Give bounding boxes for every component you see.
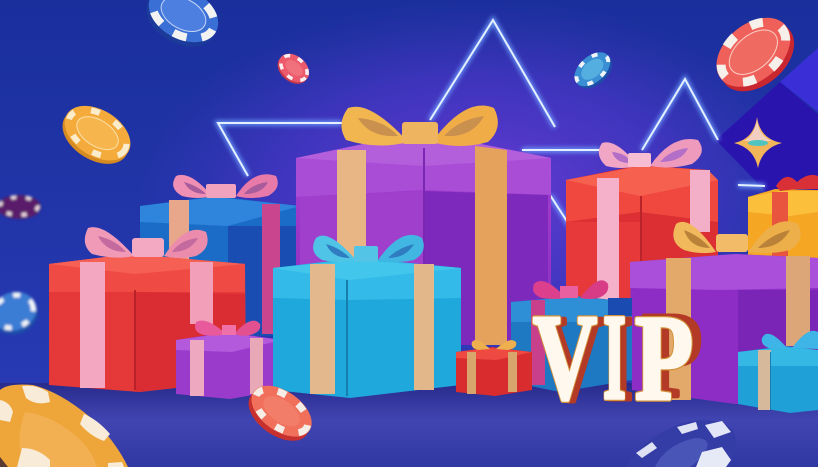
ribbon bow: [762, 331, 818, 349]
chip: large orange bottom left: [0, 385, 128, 467]
ribbon bow: [673, 221, 801, 253]
ribbon bow: [313, 235, 424, 262]
gift: red box upper right: [566, 139, 718, 300]
letter gold outline: [533, 290, 693, 426]
gift: large purple box: [296, 106, 551, 345]
gift: blue box left back: [140, 174, 300, 336]
VIP gold letters: [533, 288, 702, 426]
chip: blue bottom: [626, 420, 736, 467]
ribbon bow: [472, 340, 516, 350]
letter faces: V: [533, 290, 597, 425]
chip: small red: [272, 48, 315, 90]
gift: cyan box centre: [273, 235, 461, 398]
chip: large red top right: [703, 4, 807, 105]
ribbon bow: [341, 106, 498, 146]
icon: four-point sparkle: [734, 117, 782, 168]
gift: blue box small centre: [511, 280, 632, 392]
ribbon bow: [85, 227, 208, 258]
gift: cyan box right: [738, 331, 818, 413]
chip: small blue: [568, 46, 619, 95]
gift: small purple box: [176, 320, 282, 399]
gift: orange box far right: [748, 175, 818, 262]
ribbon bow: [533, 280, 608, 299]
ribbon bow: [195, 320, 260, 336]
letter extrusions: [538, 288, 702, 426]
gift: small red box: [456, 340, 532, 396]
floor: [0, 383, 818, 467]
letter gold outline: V: [533, 290, 597, 425]
chip: blue left: [0, 290, 38, 335]
letter faces: I: [603, 290, 626, 425]
letter extrusions: V: [538, 291, 604, 426]
chip: blue top: [146, 0, 218, 46]
gift: red box left: [49, 227, 246, 392]
letter faces: P: [635, 291, 693, 426]
neon outlines: [218, 20, 765, 226]
letter gold outline: P: [635, 291, 693, 426]
ribbon bow: [599, 139, 702, 168]
chip: red on floor: [239, 375, 321, 451]
letter extrusions: P: [642, 288, 702, 423]
letter faces: [533, 290, 693, 426]
gift: purple box right: [630, 221, 818, 404]
chip: dark purple left: [0, 193, 42, 220]
letter gold outline: I: [603, 290, 626, 425]
ribbon bow: [173, 174, 278, 198]
letter extrusions: I: [607, 291, 633, 426]
chip: orange left: [53, 95, 140, 175]
